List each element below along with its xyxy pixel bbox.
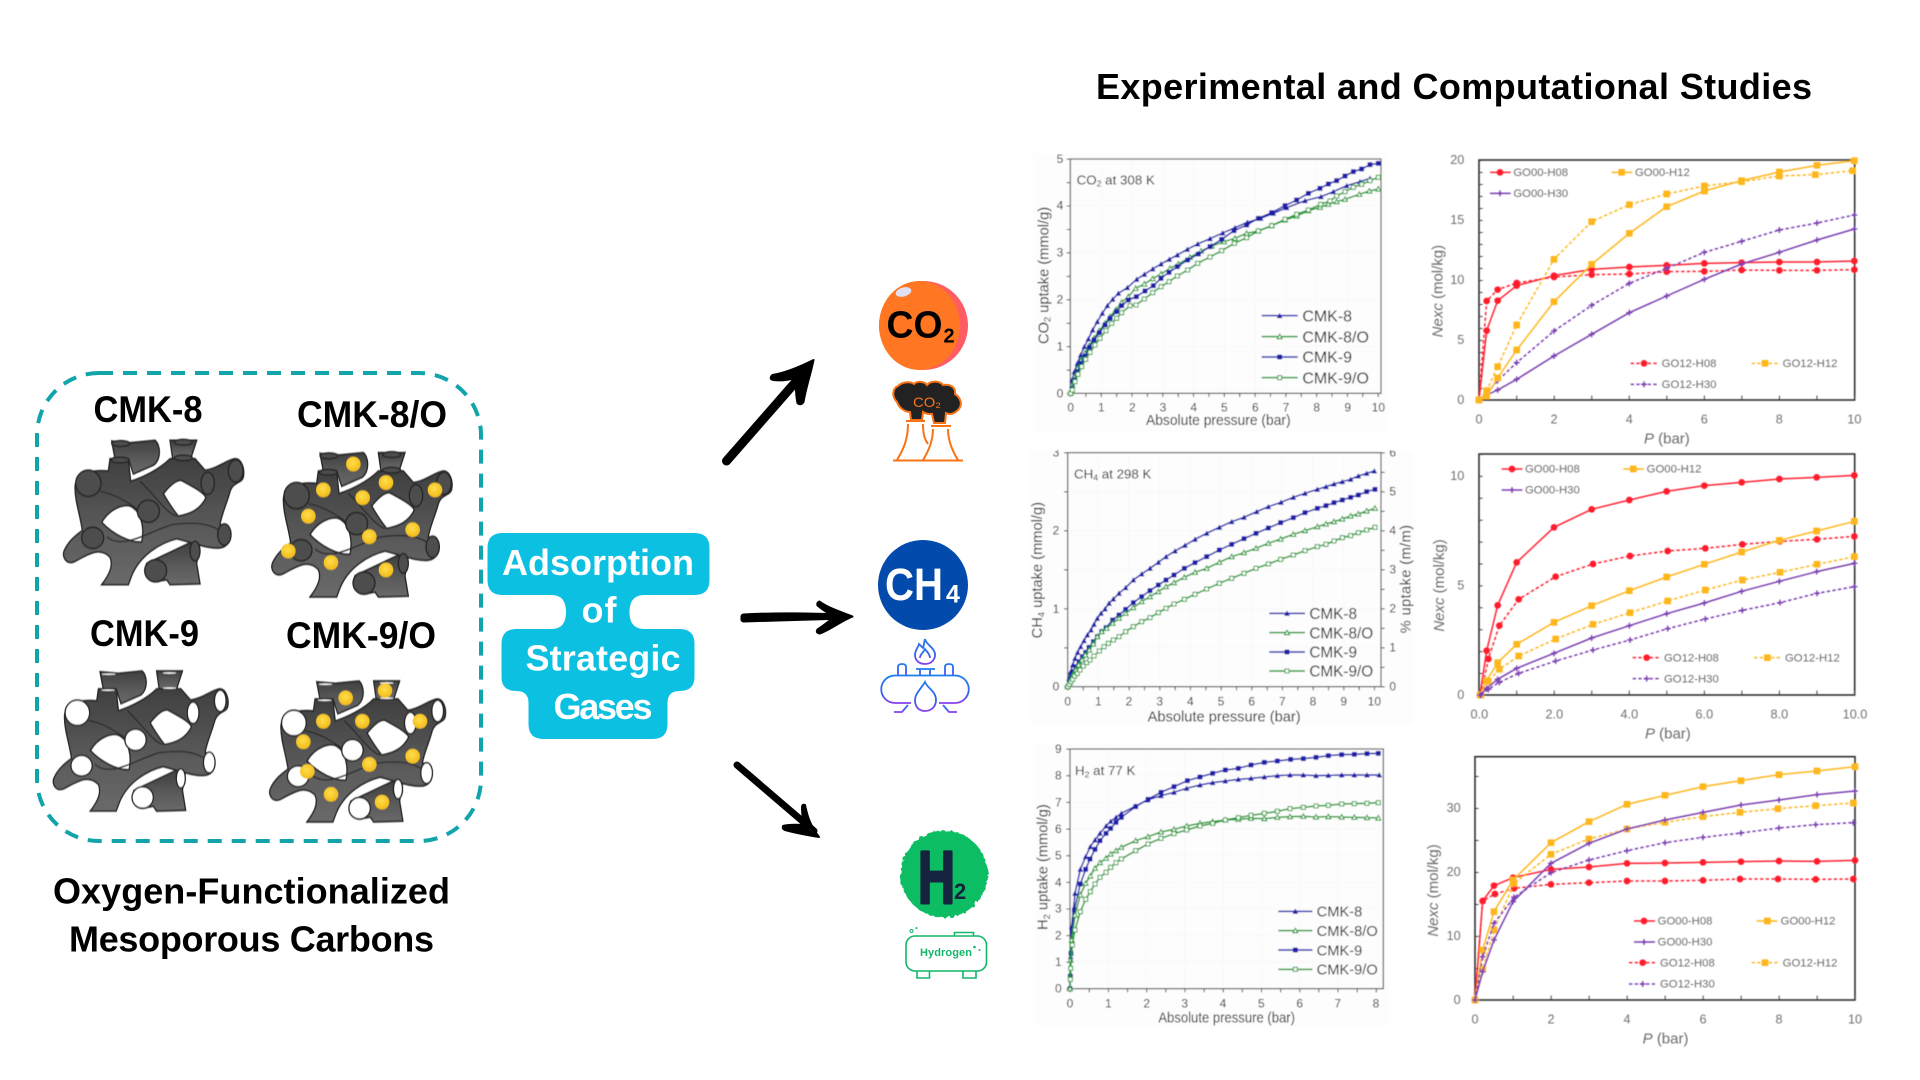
central label: adsorption of strategic gases: Adsorption [502, 542, 694, 583]
chart: H2 uptake at 77 K: 5 [1055, 849, 1062, 863]
chart: simulated excess uptake, middle: 2.0 [1546, 707, 1563, 721]
chart: H2 uptake at 77 K [1035, 742, 1388, 1027]
chart: CH4 uptake at 298 K: 10 [1368, 695, 1381, 709]
chart: CO2 uptake at 308 K: 2 [1057, 292, 1064, 306]
chart: CO2 uptake at 308 K: 0 [1067, 401, 1074, 415]
chart: CO2 uptake at 308 K: 7 [1283, 401, 1290, 415]
chart: simulated excess uptake, middle: 6.0 [1696, 707, 1713, 721]
legend: GO00-H12 [1781, 916, 1835, 928]
chart: CH4 uptake at 298 K: 1 [1095, 695, 1102, 709]
chart: simulated excess uptake, top: 10 [1450, 273, 1464, 287]
chart: H2 uptake at 77 K: Absolute pressure (bar) [1158, 1010, 1295, 1026]
chart: CO2 uptake at 308 K: at 308 K [1101, 172, 1155, 187]
chart: H2 uptake at 77 K: 0 [1067, 997, 1074, 1011]
chart: CH4 uptake at 298 K: 2 [1126, 695, 1133, 709]
dashed border [37, 373, 481, 841]
chart: CO2 uptake at 308 K: 2 [1043, 317, 1053, 322]
panel: carbon structures [37, 373, 481, 841]
chart: simulated excess uptake, top [1430, 153, 1861, 447]
caption: oxygen-functionalized mesoporous carbons: Mesoporous Carbons [69, 918, 434, 960]
chart: simulated excess uptake, middle: 0.0 [1471, 707, 1488, 721]
arrow: to CH4 [744, 602, 852, 634]
legend [1278, 905, 1378, 979]
central label: adsorption of strategic gases [488, 533, 710, 739]
chart: CH4 uptake at 298 K: 0 [1389, 680, 1396, 694]
legend: GO12-H30 [1664, 673, 1719, 685]
legend: GO00-H08 [1658, 916, 1712, 928]
structure: CMK-9 [53, 671, 228, 811]
chart: CH4 uptake at 298 K: 3 [1053, 446, 1060, 460]
chart: simulated excess uptake, bottom: 6 [1699, 1012, 1707, 1026]
icon: H2 bubble: H [918, 836, 955, 919]
legend [1262, 308, 1369, 387]
chart: CH4 uptake at 298 K: % uptake (m/m) [1399, 525, 1415, 633]
chart: H2 uptake at 77 K: 2 [1085, 769, 1090, 779]
chart: simulated excess uptake, bottom: 10 [1848, 1012, 1862, 1026]
chart: H2 uptake at 77 K: uptake (mmol/g) [1036, 804, 1052, 914]
caption: oxygen-functionalized mesoporous carbons: Oxygen-Functionalized [53, 870, 450, 912]
chart: simulated excess uptake, top: Nexc (mol/kg) [1430, 245, 1447, 337]
chart: H2 uptake at 77 K: 1 [1105, 997, 1112, 1011]
chart: CH4 uptake at 298 K: 4 [1093, 473, 1098, 483]
title: Experimental and Computational Studies [1096, 66, 1812, 107]
arrow: to H2 [737, 765, 819, 837]
chart: simulated excess uptake, top: 0 [1457, 393, 1464, 407]
central label: adsorption of strategic gases: of [582, 590, 618, 630]
legend: GO00-H12 [1647, 464, 1701, 476]
icon: hydrogen tank: Hydrogen [920, 947, 972, 959]
legend [1629, 916, 1837, 991]
chart: H2 uptake at 77 K: 2 [1055, 928, 1062, 942]
legend: GO12-H12 [1785, 652, 1840, 664]
chart: simulated excess uptake, top: 4 [1626, 412, 1633, 426]
chart: simulated excess uptake, bottom: 10 [1447, 929, 1461, 943]
chart: simulated excess uptake, bottom: 8 [1775, 1012, 1783, 1026]
chart: CH4 uptake at 298 K: 4 [1389, 524, 1396, 538]
chart: simulated excess uptake, top: 2 [1550, 412, 1558, 426]
chart: simulated excess uptake, bottom [1425, 757, 1862, 1047]
chart: CO2 uptake at 308 K: 3 [1057, 246, 1064, 260]
legend: CMK-8/O [1302, 329, 1369, 346]
legend: GO12-H08 [1660, 957, 1715, 969]
chart: H2 uptake at 77 K: H [1075, 763, 1085, 778]
chart: CH4 uptake at 298 K: 4 [1187, 695, 1194, 709]
legend: GO00-H30 [1525, 485, 1580, 497]
chart: simulated excess uptake, bottom: Nexc (mol/kg) [1425, 844, 1442, 937]
legend: GO12-H12 [1783, 957, 1837, 969]
chart: simulated excess uptake, middle: 8.0 [1771, 707, 1788, 721]
legend: GO12-H30 [1660, 979, 1715, 991]
chart: H2 uptake at 77 K: 0 [1055, 982, 1062, 996]
chart: simulated excess uptake, top: 20 [1450, 153, 1464, 167]
heading: CMK-8: CMK-8 [94, 389, 202, 430]
chart: H2 uptake at 77 K: 8 [1373, 997, 1380, 1011]
chart: H2 uptake at 77 K: 5 [1258, 997, 1265, 1011]
chart: H2 uptake at 77 K: 6 [1296, 997, 1303, 1011]
chart: H2 uptake at 77 K: 3 [1181, 997, 1188, 1011]
chart: CO2 uptake at 308 K: 4 [1057, 199, 1064, 213]
chart: simulated excess uptake, bottom: 2 [1547, 1012, 1555, 1026]
chart: H2 uptake at 77 K: at 77 K [1089, 763, 1136, 778]
chart: CH4 uptake at 298 K: 1 [1053, 602, 1060, 616]
chart: CO2 uptake at 308 K: Absolute pressure (bar) [1146, 413, 1291, 429]
chart: simulated excess uptake, top: 6 [1701, 412, 1708, 426]
chart: CO2 uptake at 308 K: 5 [1057, 152, 1064, 166]
chart: simulated excess uptake, bottom: 0 [1471, 1012, 1479, 1026]
chart: CH4 uptake at 298 K: 6 [1389, 446, 1396, 460]
chart: CO2 uptake at 308 K: 3 [1160, 401, 1167, 415]
chart: CO2 uptake at 308 K: 4 [1190, 401, 1197, 415]
legend: CMK-8 [1317, 905, 1362, 921]
icon: CO2 bubble [879, 281, 968, 370]
chart: simulated excess uptake, middle: 10.0 [1843, 707, 1867, 721]
icon: natural gas tank [881, 639, 969, 712]
icon: CH4 bubble: CH [885, 559, 943, 610]
legend: CMK-9/O [1317, 963, 1378, 979]
chart: CH4 uptake at 298 K: 7 [1279, 695, 1286, 709]
chart: CO2 uptake at 308 K: 9 [1344, 401, 1351, 415]
chart: simulated excess uptake, bottom: 20 [1447, 865, 1461, 879]
icon: H2 bubble [900, 830, 988, 919]
heading: CMK-8/O: CMK-8/O [297, 394, 447, 435]
chart: CO2 uptake at 308 K: 10 [1372, 401, 1385, 415]
chart: H2 uptake at 77 K: H [1036, 919, 1052, 930]
chart: simulated excess uptake, bottom: 30 [1447, 801, 1461, 815]
legend: CMK-8/O [1309, 625, 1373, 642]
chart: simulated excess uptake, middle: 0 [1457, 688, 1464, 702]
chart: CO2 uptake at 308 K: 1 [1057, 339, 1064, 353]
chart: CH4 uptake at 298 K: 8 [1310, 695, 1317, 709]
caption: oxygen-functionalized mesoporous carbons [53, 870, 450, 960]
icon: CH4 bubble [878, 540, 968, 630]
chart: simulated excess uptake, top: P (bar) [1644, 430, 1690, 447]
chart: simulated excess uptake, bottom: 4 [1623, 1012, 1631, 1026]
chart: CH4 uptake at 298 K: Absolute pressure (bar) [1148, 710, 1301, 726]
legend: GO00-H12 [1635, 167, 1690, 179]
chart: H2 uptake at 77 K: 2 [1042, 914, 1052, 919]
chart: CH4 uptake at 298 K [1030, 440, 1415, 726]
chart: CO2 uptake at 308 K: CO [1036, 322, 1052, 344]
structure: CMK-9/O [270, 681, 446, 822]
heading: CMK-9: CMK-9 [90, 613, 199, 654]
chart: CO2 uptake at 308 K [1033, 152, 1387, 432]
chart: CH4 uptake at 298 K: 9 [1340, 695, 1347, 709]
structure: CMK-8/O [272, 452, 452, 597]
chart: simulated excess uptake, top: 15 [1450, 213, 1464, 227]
icon: CO2 bubble: 2 [944, 326, 955, 348]
legend: CMK-8 [1302, 308, 1352, 325]
chart: H2 uptake at 77 K: 4 [1220, 997, 1227, 1011]
chart: CH4 uptake at 298 K: 2 [1053, 524, 1060, 538]
chart: simulated excess uptake, middle: Nexc (mol/kg) [1431, 539, 1448, 632]
icon: H2 bubble: 2 [954, 879, 966, 904]
chart: simulated excess uptake, top: 5 [1457, 333, 1464, 347]
legend [1269, 606, 1373, 681]
chart: CO2 uptake at 308 K: 2 [1097, 179, 1102, 189]
chart: simulated excess uptake, middle: 5 [1457, 578, 1464, 592]
legend: GO00-H08 [1513, 167, 1568, 179]
central label: adsorption of strategic gases: Gases [554, 686, 652, 727]
heading: CMK-9/O: CMK-9/O [286, 615, 436, 656]
chart: CH4 uptake at 298 K: 6 [1248, 695, 1255, 709]
legend: CMK-9 [1309, 645, 1357, 662]
icon: CO2 emitting factory: CO₂ [913, 394, 941, 410]
chart: CO2 uptake at 308 K: 0 [1057, 386, 1064, 400]
legend: GO12-H08 [1664, 652, 1719, 664]
chart: CO2 uptake at 308 K: 1 [1098, 401, 1105, 415]
chart: H2 uptake at 77 K: 3 [1055, 902, 1062, 916]
chart: simulated excess uptake, middle: 10 [1450, 469, 1464, 483]
structure: CMK-8 [63, 439, 244, 585]
legend: GO00-H08 [1525, 464, 1580, 476]
chart: simulated excess uptake, middle: 4.0 [1621, 707, 1638, 721]
legend: CMK-9/O [1309, 664, 1373, 681]
chart: CH4 uptake at 298 K: 3 [1156, 695, 1163, 709]
legend [1502, 464, 1840, 685]
icon: CH4 bubble: 4 [946, 580, 960, 608]
chart: H2 uptake at 77 K: 8 [1055, 769, 1062, 783]
chart: CH4 uptake at 298 K: CH [1030, 617, 1046, 638]
chart: CH4 uptake at 298 K: 2 [1389, 602, 1396, 616]
legend: GO12-H30 [1662, 379, 1716, 391]
chart: CO2 uptake at 308 K: uptake (mmol/g) [1036, 207, 1052, 317]
icon: hydrogen tank [906, 927, 986, 978]
chart: simulated excess uptake, middle [1431, 454, 1867, 742]
chart: CH4 uptake at 298 K: 5 [1218, 695, 1225, 709]
chart: H2 uptake at 77 K: 9 [1055, 742, 1062, 756]
chart: simulated excess uptake, bottom: P (bar) [1643, 1030, 1688, 1047]
chart: CH4 uptake at 298 K: 3 [1389, 563, 1396, 577]
chart: CH4 uptake at 298 K: CH [1074, 466, 1093, 481]
chart: CH4 uptake at 298 K: 4 [1036, 612, 1046, 617]
chart: H2 uptake at 77 K: 4 [1055, 875, 1062, 889]
chart: simulated excess uptake, middle: P (bar) [1645, 725, 1691, 742]
chart: CH4 uptake at 298 K: 1 [1389, 640, 1396, 654]
chart: H2 uptake at 77 K: 6 [1055, 822, 1062, 836]
chart: CH4 uptake at 298 K: uptake (mmol/g) [1030, 502, 1046, 612]
chart: H2 uptake at 77 K: 7 [1055, 795, 1062, 809]
chart: simulated excess uptake, top: 0 [1475, 412, 1483, 426]
chart: CO2 uptake at 308 K: CO [1077, 172, 1097, 187]
chart: H2 uptake at 77 K: 1 [1055, 955, 1062, 969]
chart: simulated excess uptake, top: 8 [1776, 412, 1783, 426]
chart: CH4 uptake at 298 K: 5 [1389, 485, 1396, 499]
legend: CMK-8/O [1317, 924, 1378, 940]
legend: GO00-H30 [1513, 188, 1568, 200]
chart: H2 uptake at 77 K: 2 [1143, 997, 1150, 1011]
chart: simulated excess uptake, bottom: 0 [1454, 993, 1461, 1007]
chart: CH4 uptake at 298 K: 0 [1064, 695, 1071, 709]
chart: H2 uptake at 77 K: 7 [1334, 997, 1341, 1011]
legend: GO12-H08 [1662, 358, 1716, 370]
chart: CO2 uptake at 308 K: 6 [1252, 401, 1259, 415]
chart: CH4 uptake at 298 K: at 298 K [1098, 466, 1152, 481]
legend: CMK-9 [1317, 943, 1362, 959]
chart: CH4 uptake at 298 K: 0 [1053, 680, 1060, 694]
icon: CO2 emitting factory [893, 382, 963, 460]
legend: CMK-8 [1309, 606, 1357, 623]
chart: simulated excess uptake, top: 10 [1847, 412, 1861, 426]
chart: CO2 uptake at 308 K: 5 [1221, 401, 1228, 415]
arrow: to CO2 [726, 360, 814, 461]
legend [1490, 167, 1837, 391]
legend: CMK-9/O [1302, 370, 1369, 387]
chart: CO2 uptake at 308 K: 2 [1129, 401, 1136, 415]
legend: GO00-H30 [1658, 937, 1712, 949]
central label: adsorption of strategic gases: Strategic [526, 638, 680, 678]
legend: GO12-H12 [1783, 358, 1837, 370]
icon: CO2 bubble: CO [886, 304, 942, 346]
chart: CO2 uptake at 308 K: 8 [1313, 401, 1320, 415]
structures: carbon frameworks [53, 439, 452, 822]
legend: CMK-9 [1302, 350, 1352, 367]
